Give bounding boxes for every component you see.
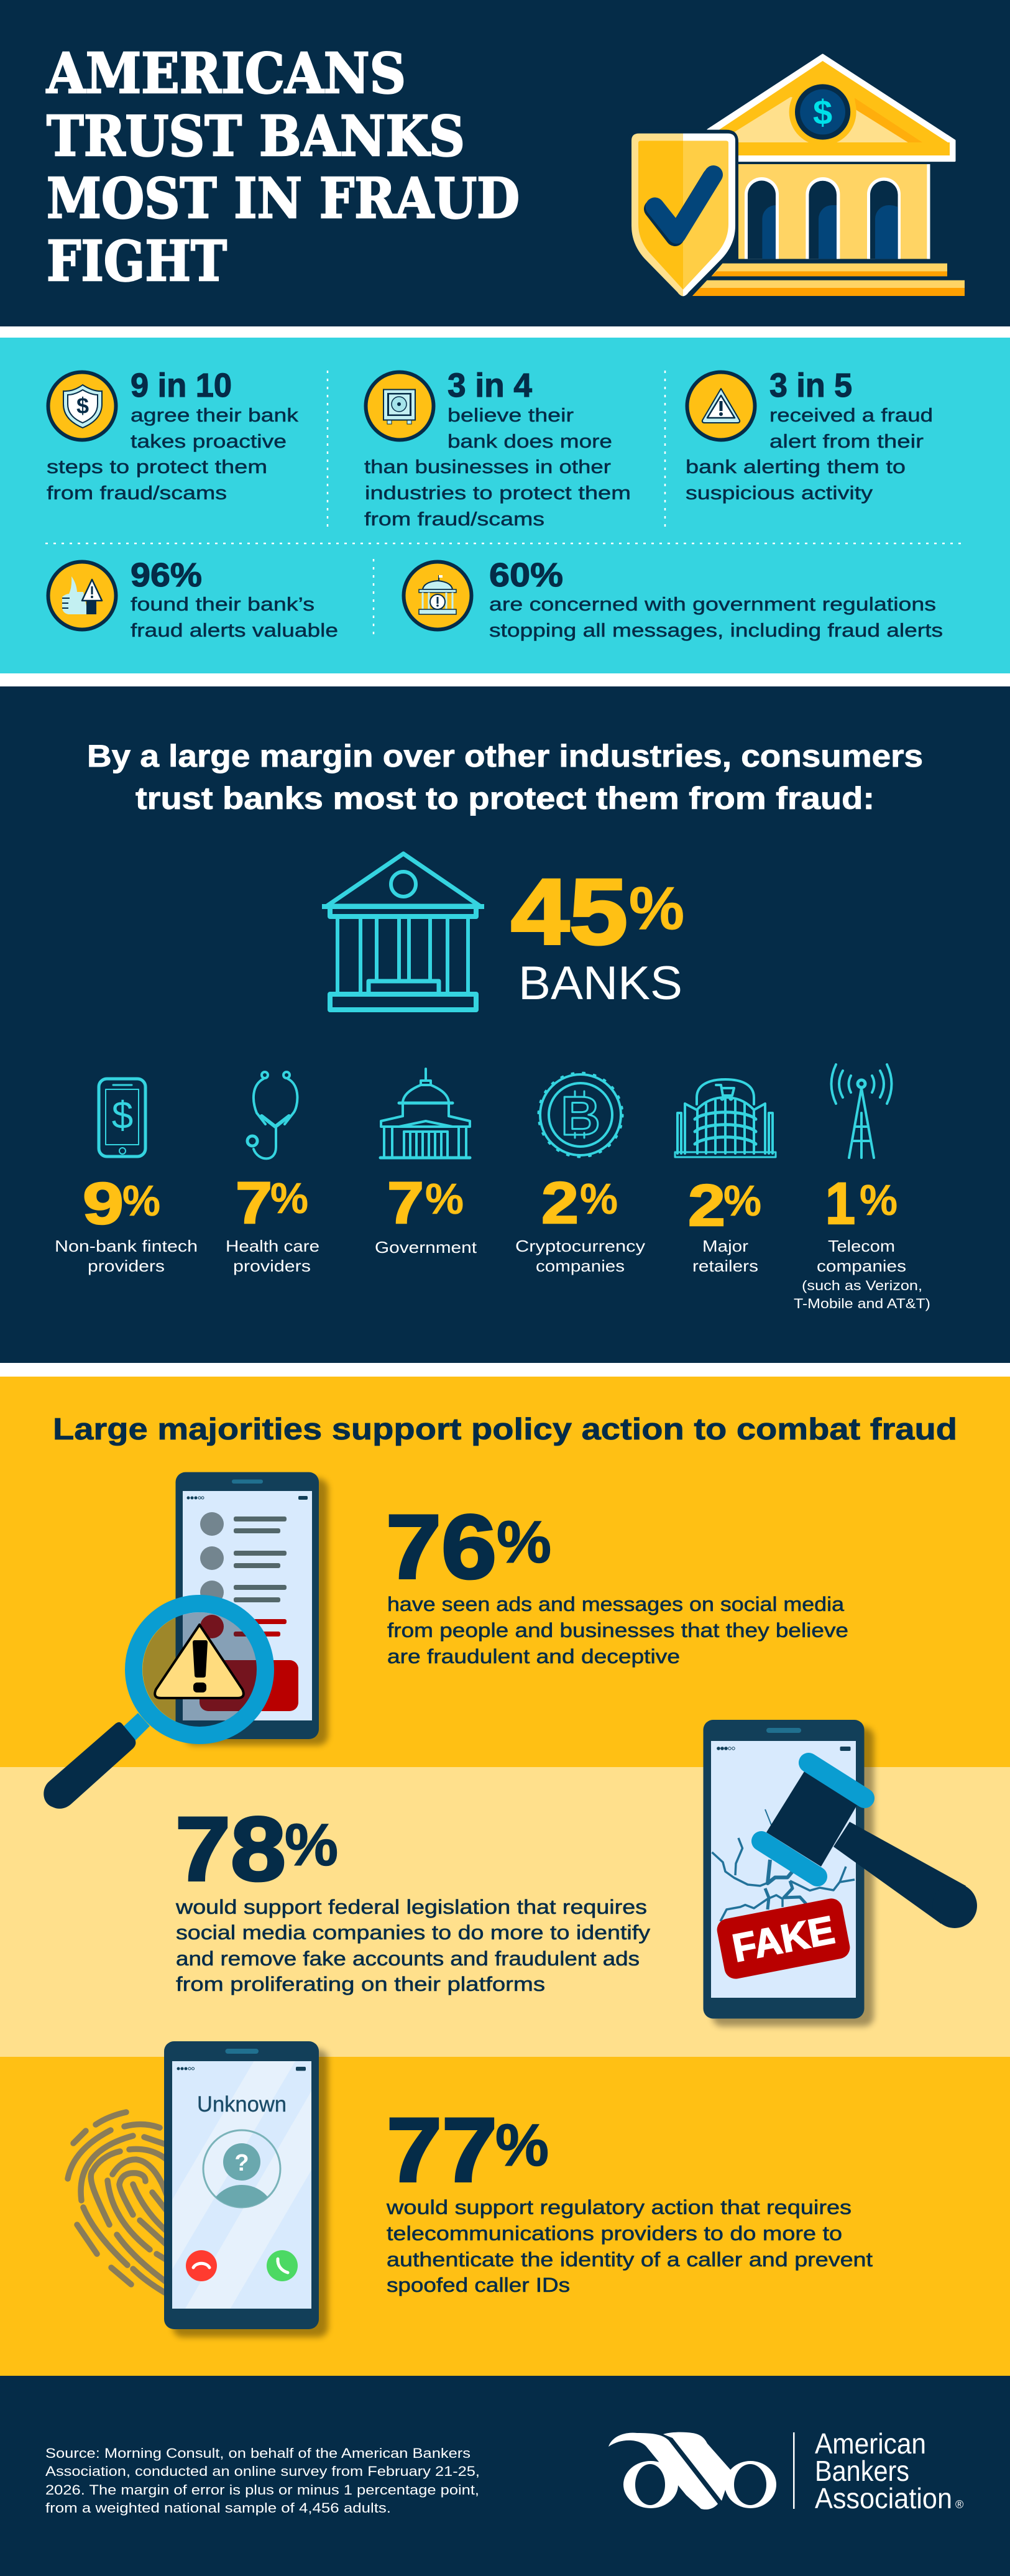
stat text: alert from their bbox=[769, 430, 924, 452]
icon: phone bbox=[99, 1079, 145, 1156]
icon: stethoscope bbox=[247, 1072, 297, 1158]
percentage: 7 bbox=[387, 1170, 424, 1236]
stat heading: 60% bbox=[489, 556, 563, 594]
label: Government bbox=[375, 1238, 477, 1257]
title bbox=[46, 40, 520, 293]
label bbox=[226, 1237, 319, 1275]
stat heading: 3 in 5 bbox=[769, 367, 852, 404]
logo: American Bankers Association: Association bbox=[815, 2482, 952, 2514]
logo: American Bankers Association bbox=[608, 2427, 963, 2514]
stat text bbox=[131, 593, 338, 641]
icon: fingerprint bbox=[68, 2112, 168, 2294]
stat text: bank alerting them to bbox=[686, 456, 906, 478]
percentage: 1 bbox=[825, 1171, 855, 1237]
stat text bbox=[364, 404, 631, 530]
stat: 45% banks bbox=[511, 859, 684, 1010]
label: providers bbox=[88, 1257, 165, 1275]
label bbox=[515, 1237, 645, 1275]
label bbox=[692, 1237, 758, 1275]
stat text: believe their bbox=[448, 404, 574, 426]
percentage: 2 bbox=[688, 1173, 725, 1239]
stat: 77% bbox=[387, 2099, 549, 2200]
text: 78% detail: and remove fake accounts and fraudulent ads bbox=[176, 1947, 640, 1970]
illustration: phone with magnifier bbox=[44, 1472, 328, 1809]
icon: phone: $ bbox=[112, 1094, 133, 1137]
label: Major bbox=[702, 1237, 748, 1255]
icon: government building with alert bbox=[404, 562, 471, 629]
caller name: Unknown bbox=[197, 2092, 287, 2117]
column: major retailers bbox=[675, 1079, 776, 1275]
text: 76% detail bbox=[387, 1593, 848, 1668]
stat: 77%: % bbox=[495, 2112, 549, 2179]
panel: header bbox=[0, 0, 1010, 326]
panel: survey statistics bbox=[0, 338, 1010, 673]
text: 78% detail: social media companies to do more to identify bbox=[176, 1921, 650, 1944]
label: (such as Verizon, bbox=[802, 1278, 922, 1293]
stat text: takes proactive bbox=[131, 430, 287, 452]
icon: shield with dollar: $ bbox=[76, 393, 89, 418]
stat text bbox=[47, 404, 299, 504]
stat: 9 in 10 bbox=[47, 367, 299, 504]
heading: Large majorities support policy action to combat fraud bbox=[53, 1413, 957, 1446]
icon: shield with dollar bbox=[48, 372, 116, 440]
stat text: suspicious activity bbox=[686, 482, 873, 504]
icon: store bbox=[675, 1079, 776, 1157]
label: companies bbox=[536, 1257, 625, 1275]
text: 77% detail: authenticate the identity of a caller and prevent bbox=[387, 2248, 873, 2271]
stamp: fake bbox=[715, 1896, 852, 1981]
text: 77% detail: spoofed caller IDs bbox=[387, 2274, 570, 2296]
column: telecom bbox=[794, 1064, 930, 1311]
stat text: from fraud/scams bbox=[47, 482, 227, 504]
label bbox=[55, 1237, 198, 1275]
heading bbox=[87, 739, 923, 816]
source note: 2026. The margin of error is plus or minus 1 percentage point, bbox=[45, 2482, 479, 2498]
icon: accept call bbox=[267, 2250, 298, 2281]
panel: policy action bbox=[0, 1377, 1010, 2376]
stat text: steps to protect them bbox=[47, 456, 267, 478]
text: 77% detail: would support regulatory action that requires bbox=[386, 2196, 852, 2218]
stat text: fraud alerts valuable bbox=[131, 619, 338, 641]
icon: decline call bbox=[186, 2250, 217, 2281]
column: fintech bbox=[55, 1079, 198, 1275]
stat heading: 3 in 4 bbox=[448, 367, 532, 404]
logo: American Bankers Association: Bankers bbox=[815, 2455, 909, 2487]
stat text bbox=[489, 593, 943, 641]
icon: bitcoin: B bbox=[561, 1085, 600, 1147]
icon: warning triangle bbox=[687, 372, 755, 440]
text: 77% detail bbox=[386, 2196, 873, 2296]
icon: bank outline bbox=[322, 854, 484, 1010]
stat text: than businesses in other bbox=[364, 456, 611, 478]
panel: industry trust bbox=[0, 686, 1010, 1363]
percentage: % bbox=[860, 1176, 898, 1224]
text: 76% detail: are fraudulent and deceptive bbox=[387, 1645, 680, 1668]
icon: unknown avatar: ? bbox=[234, 2150, 249, 2176]
illustration: phone with gavel and fake stamp bbox=[704, 1720, 977, 2026]
stat: 78%: 78 bbox=[175, 1798, 286, 1900]
stat: 96% bbox=[48, 556, 338, 641]
source note bbox=[45, 2445, 480, 2516]
label: retailers bbox=[692, 1257, 758, 1275]
stat text: stopping all messages, including fraud alerts bbox=[489, 619, 943, 641]
stat text bbox=[686, 404, 933, 504]
panel: footer bbox=[0, 2376, 1010, 2576]
label: Cryptocurrency bbox=[515, 1237, 645, 1255]
percentage: % bbox=[122, 1176, 160, 1225]
stat: 76%: 76 bbox=[386, 1496, 497, 1597]
column: health care bbox=[226, 1072, 319, 1275]
percentage bbox=[387, 1170, 464, 1236]
icon: bank with shield: $ bbox=[813, 93, 832, 132]
label bbox=[794, 1237, 930, 1311]
icon: cell tower bbox=[832, 1064, 891, 1158]
logo: American Bankers Association: ® bbox=[955, 2498, 963, 2511]
text: 76% detail: from people and businesses that they believe bbox=[387, 1619, 848, 1641]
label: Telecom bbox=[828, 1237, 895, 1255]
label: Non-bank fintech bbox=[55, 1237, 198, 1255]
percentage: % bbox=[270, 1174, 308, 1222]
stat: 76% bbox=[386, 1496, 551, 1597]
text: 77% detail: telecommunications providers to do more to bbox=[387, 2222, 842, 2245]
percentage: 9 bbox=[83, 1171, 124, 1237]
text: 78% detail: would support federal legislation that requires bbox=[175, 1896, 647, 1918]
label: T-Mobile and AT&T) bbox=[794, 1296, 930, 1311]
stat: 3 in 4 bbox=[364, 367, 631, 530]
icon: bank with shield bbox=[628, 55, 965, 305]
title: TRUST BANKS bbox=[47, 103, 465, 169]
title: MOST IN FRAUD bbox=[47, 165, 520, 231]
icon: thumbs up with alert bbox=[48, 562, 116, 629]
stat text: found their bank’s bbox=[131, 593, 314, 615]
icon: unknown avatar bbox=[203, 2129, 281, 2209]
stat text: from fraud/scams bbox=[364, 508, 544, 530]
logo: American Bankers Association: American bbox=[815, 2427, 926, 2460]
column: cryptocurrency bbox=[515, 1073, 645, 1275]
source note: Association, conducted an online survey from February 21-25, bbox=[45, 2463, 480, 2479]
icon: bitcoin bbox=[538, 1073, 623, 1157]
stat text: agree their bank bbox=[131, 404, 299, 426]
text: 78% detail bbox=[175, 1896, 650, 1995]
label: Health care bbox=[226, 1237, 319, 1255]
stat: 45% banks: % bbox=[629, 874, 684, 942]
column: government bbox=[375, 1069, 477, 1257]
stat: 3 in 5 bbox=[686, 367, 933, 504]
heading: trust banks most to protect them from fraud: bbox=[135, 781, 875, 816]
percentage bbox=[825, 1171, 898, 1237]
stat: 78%: % bbox=[285, 1812, 338, 1878]
heading: By a large margin over other industries, consumers bbox=[87, 739, 923, 773]
icon: capitol bbox=[380, 1069, 470, 1158]
percentage: 7 bbox=[236, 1170, 272, 1236]
stat: 78% bbox=[175, 1798, 338, 1900]
percentage bbox=[236, 1170, 308, 1236]
text: 78% detail: from proliferating on their platforms bbox=[176, 1973, 545, 1995]
label: providers bbox=[233, 1257, 311, 1275]
source note: Source: Morning Consult, on behalf of the American Bankers bbox=[45, 2445, 471, 2461]
stat text: received a fraud bbox=[769, 404, 933, 426]
percentage: % bbox=[723, 1176, 761, 1225]
stat text: are concerned with government regulations bbox=[489, 593, 936, 615]
percentage: 2 bbox=[541, 1170, 579, 1236]
stat: 45% banks: 45 bbox=[511, 859, 628, 964]
stat: 77%: 77 bbox=[387, 2099, 497, 2200]
percentage bbox=[83, 1171, 160, 1237]
percentage bbox=[541, 1170, 618, 1236]
stat heading: 96% bbox=[131, 556, 202, 594]
label: companies bbox=[817, 1257, 906, 1275]
text: 76% detail: have seen ads and messages on social media bbox=[387, 1593, 844, 1615]
stat heading: 9 in 10 bbox=[131, 367, 232, 404]
percentage: % bbox=[580, 1175, 618, 1223]
title: FIGHT bbox=[47, 228, 227, 293]
stamp: fake: FAKE bbox=[729, 1908, 838, 1970]
stat: 60% bbox=[404, 556, 943, 641]
stat text: industries to protect them bbox=[365, 482, 631, 504]
title: AMERICANS bbox=[46, 40, 406, 106]
stat: 45% banks: BANKS bbox=[518, 957, 682, 1010]
percentage: % bbox=[425, 1175, 464, 1223]
source note: from a weighted national sample of 4,456 adults. bbox=[45, 2500, 391, 2516]
percentage bbox=[688, 1173, 761, 1239]
illustration: phone with unknown caller and fingerprint bbox=[68, 2041, 328, 2337]
stat: 76%: % bbox=[497, 1509, 551, 1576]
stat text: bank does more bbox=[448, 430, 612, 452]
icon: safe bbox=[365, 372, 434, 440]
